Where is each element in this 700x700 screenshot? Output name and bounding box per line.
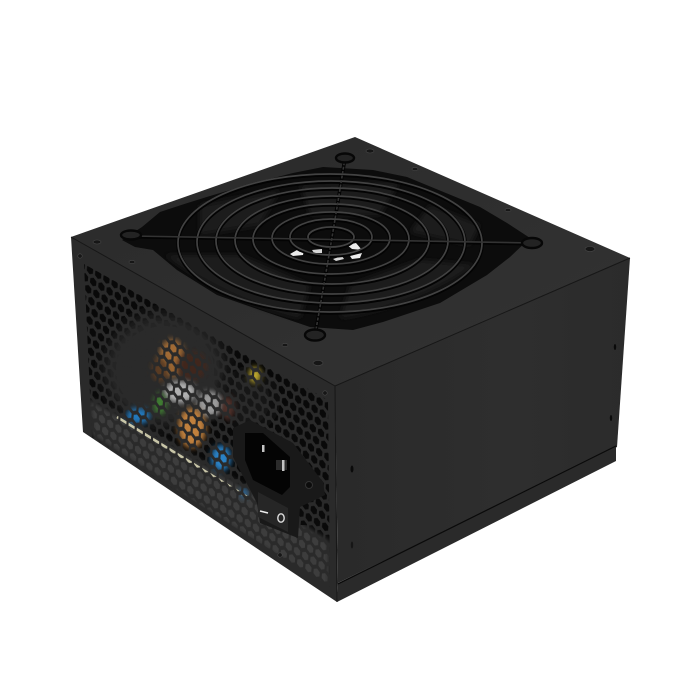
- bottom lip of case: [337, 446, 616, 602]
- edges between faces: [71, 237, 337, 602]
- fan blades: [165, 182, 480, 318]
- power inlet and switch module: [233, 420, 325, 538]
- power socket: [245, 433, 290, 495]
- top face of case: [71, 137, 630, 386]
- fan housing: [122, 167, 530, 330]
- illustration: PC power supply unit: [70, 137, 630, 602]
- fan guard spokes: [132, 158, 532, 335]
- ventilation mesh with internal components: [84, 264, 330, 582]
- fan guard ring shadows: [132, 158, 532, 335]
- left face plate: [71, 237, 338, 602]
- fan guard wire rings: [178, 174, 482, 312]
- right side panel: [335, 258, 630, 602]
- fan mounting screws: [121, 154, 542, 340]
- rocker switch: [258, 492, 288, 532]
- small case screws and holes: [78, 149, 595, 557]
